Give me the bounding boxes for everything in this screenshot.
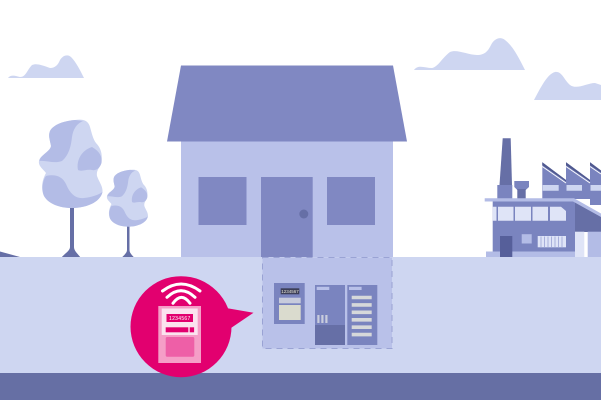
foliage xyxy=(107,170,148,227)
tree: large xyxy=(39,120,103,258)
pale column xyxy=(575,232,584,258)
door xyxy=(500,236,512,258)
right wing xyxy=(574,200,601,232)
door xyxy=(261,177,313,258)
window band xyxy=(493,207,566,221)
trunk xyxy=(61,207,81,258)
hill at left edge xyxy=(0,252,20,257)
small chimney xyxy=(514,181,529,190)
vent xyxy=(538,236,566,247)
sawtooth roof halls xyxy=(542,162,601,205)
icon: wifi xyxy=(162,284,200,303)
chimney xyxy=(500,138,512,185)
cloud: right xyxy=(534,72,601,100)
basement xyxy=(262,258,392,348)
cabinet left xyxy=(315,285,345,345)
tree: small xyxy=(107,170,148,258)
small meter: 1234567 xyxy=(281,289,299,294)
window left xyxy=(198,177,246,225)
small window xyxy=(522,234,532,244)
cloud: middle xyxy=(414,38,525,70)
cabinet right xyxy=(347,285,377,345)
main hall xyxy=(493,201,575,253)
bubble tail xyxy=(226,308,254,328)
callout bubble xyxy=(130,276,254,377)
ground xyxy=(0,257,601,373)
roof slab xyxy=(485,198,601,217)
icon: smart meter: 1234567 xyxy=(169,316,191,322)
chimney base xyxy=(497,185,512,199)
bubble circle xyxy=(130,276,232,377)
foliage xyxy=(39,120,103,208)
roof xyxy=(167,66,407,142)
factory xyxy=(485,138,601,258)
side block xyxy=(588,232,601,258)
base xyxy=(486,252,576,258)
house xyxy=(167,66,407,258)
cloud: left xyxy=(8,55,84,78)
wall xyxy=(181,141,393,258)
trunk xyxy=(122,226,134,258)
window right xyxy=(327,177,375,225)
bottom band xyxy=(0,373,601,400)
basement room xyxy=(262,258,392,348)
door knob xyxy=(299,210,308,218)
